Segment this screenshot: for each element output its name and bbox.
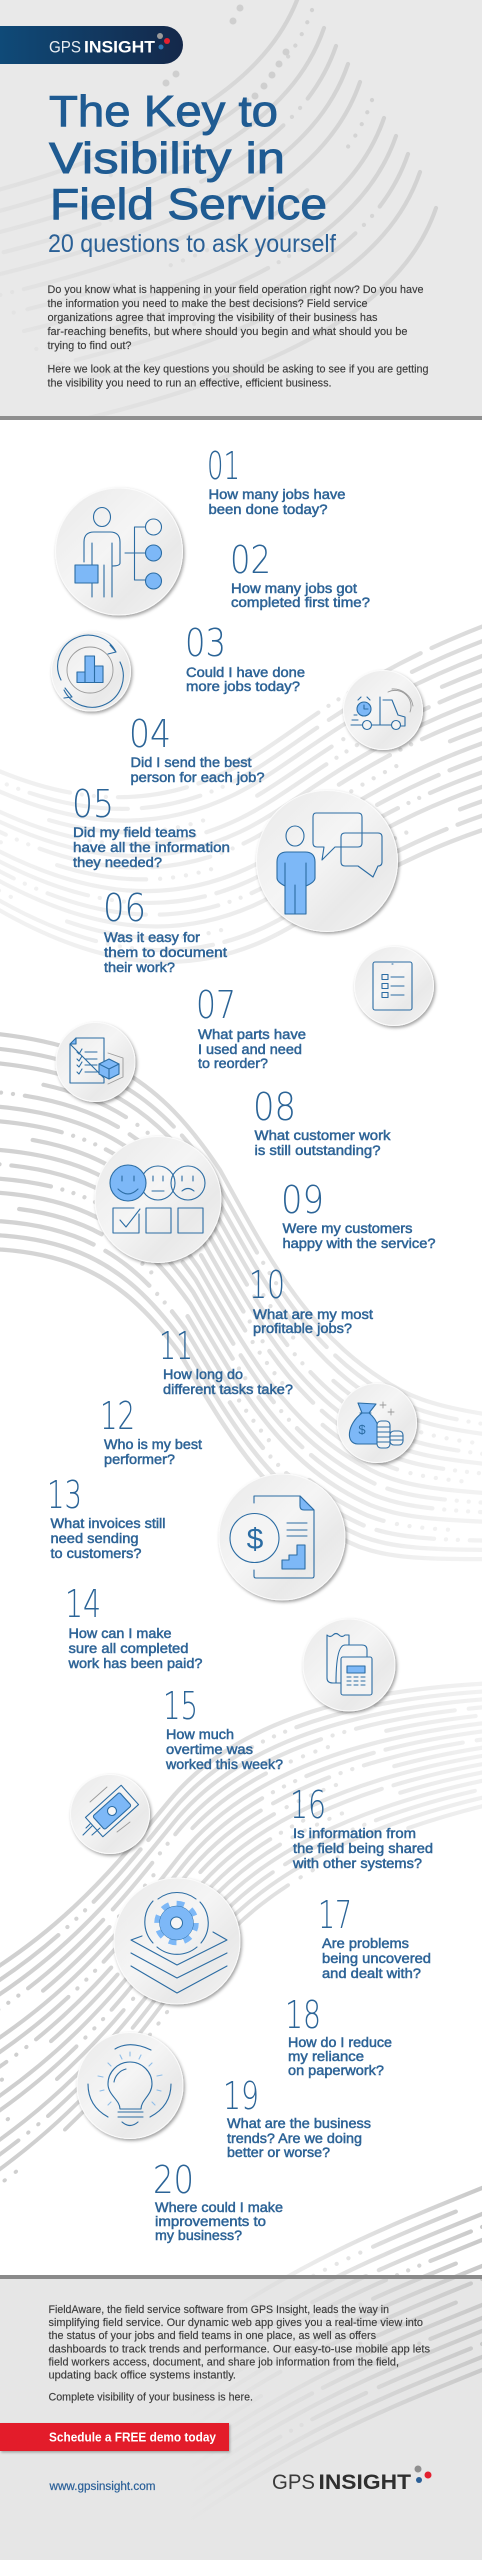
intro text: Do you know what is happening in your field operation right now? Do you have (48, 284, 424, 296)
number 09: 09 (281, 1178, 324, 1222)
question text 01: How many jobs have (208, 487, 346, 502)
question 06 (103, 886, 227, 975)
question text 06: Was it easy for (104, 930, 201, 945)
icon: invoice with dollar circle (219, 1474, 345, 1600)
question text 02: How many jobs got (231, 581, 357, 596)
icon: bar chart in cycle arrows (52, 632, 130, 711)
icon: flying banknote (70, 1774, 150, 1854)
question text 13: need sending (50, 1531, 138, 1546)
question 19 (223, 2074, 371, 2160)
number 01: 01 (207, 444, 240, 488)
question 17 (318, 1893, 431, 1981)
number 20: 20 (153, 2158, 194, 2202)
question text 12 (104, 1437, 202, 1467)
question text 20: Where could I make (155, 2200, 283, 2215)
question text 07 (198, 1027, 306, 1071)
question text 12: performer? (104, 1452, 175, 1467)
number 02: 02 (230, 538, 271, 582)
intro text: the visibility you need to run an effective, efficient business. (48, 378, 332, 390)
logo dots (414, 2466, 432, 2483)
number 19: 19 (223, 2074, 259, 2118)
question text 03: Could I have done (186, 665, 305, 680)
question text 14: sure all completed (68, 1641, 188, 1656)
question 15 (163, 1684, 283, 1772)
question text 14 (67, 1626, 203, 1671)
footer text: field workers access, document, and share job information from the field, (48, 2356, 399, 2368)
number 15: 15 (163, 1684, 198, 1728)
number 03: 03 (185, 621, 226, 665)
question text 19: better or worse? (227, 2145, 330, 2160)
header dots (162, 4, 290, 100)
question text 20: improvements to (155, 2214, 266, 2229)
question text 13 (50, 1516, 166, 1561)
wave band: footer arcs (180, 2156, 482, 2527)
number 14: 14 (65, 1582, 101, 1626)
question text 03 (186, 665, 305, 694)
title (49, 87, 327, 229)
question text 13: to customers? (50, 1546, 142, 1561)
question text 14: work has been paid? (67, 1656, 203, 1671)
question text 09: Were my customers (282, 1221, 413, 1236)
question 04 (129, 712, 264, 785)
question text 08: What customer work (254, 1128, 391, 1143)
number 06: 06 (103, 886, 146, 930)
question text 18: on paperwork? (288, 2063, 384, 2078)
question text 19: trends? Are we doing (227, 2131, 362, 2146)
call to action button (0, 2423, 229, 2451)
title: Field Service (50, 180, 327, 229)
footer text: simplifying field service. Our dynamic web app gives you a real-time view into (48, 2317, 423, 2329)
question text 05 (73, 825, 230, 870)
header panel background (0, 0, 482, 416)
number 13: 13 (47, 1473, 82, 1517)
footer logo (272, 2466, 432, 2494)
question text 06 (104, 930, 227, 975)
question text 15: How much (166, 1727, 234, 1742)
question 12 (100, 1394, 202, 1467)
number 16: 16 (290, 1783, 326, 1827)
intro text: organizations agree that improving the visibility of their business has (48, 312, 378, 324)
question text 15: overtime was (166, 1742, 253, 1757)
question text 18 (288, 2035, 392, 2078)
question text 11: How long do (163, 1367, 243, 1382)
wave band: right to lower left (0, 1682, 482, 2205)
number 17: 17 (318, 1893, 352, 1937)
wave band: header arcs (0, 0, 436, 421)
icon: card payment terminal (303, 1619, 395, 1711)
question text 20: my business? (155, 2228, 242, 2243)
footer text: updating back office systems instantly. (48, 2370, 236, 2382)
question 01 (207, 444, 346, 517)
question text 11: different tasks take? (163, 1382, 293, 1397)
question text 07: I used and need (198, 1042, 302, 1057)
intro text (48, 284, 428, 390)
question text 15: worked this week? (165, 1757, 283, 1772)
logo wordmark: GPS (49, 38, 81, 56)
icon: person with speech bubbles (256, 790, 398, 932)
number 07: 07 (196, 983, 236, 1027)
question text 17: Are problems (322, 1936, 409, 1951)
icon: tablet checklist (354, 946, 434, 1026)
icon: truck with clock (344, 670, 422, 750)
header divider (0, 416, 482, 420)
question text 06: them to document (104, 945, 227, 960)
question text 11 (163, 1367, 293, 1397)
question 02 (230, 538, 370, 610)
icon: parts list and cube (56, 1022, 135, 1102)
question 05 (72, 782, 230, 870)
question text 02 (231, 581, 370, 610)
number 05: 05 (72, 782, 114, 826)
question text 04: person for each job? (130, 770, 264, 785)
footer text (48, 2304, 431, 2404)
question text 15 (165, 1727, 283, 1772)
question text 19: What are the business (227, 2116, 371, 2131)
question 09 (281, 1178, 436, 1251)
question text 18: my reliance (288, 2049, 364, 2064)
footer text: the status of your jobs and field teams in one place, as well as offers (48, 2330, 377, 2342)
number 18: 18 (285, 1993, 321, 2037)
number 12: 12 (100, 1394, 135, 1438)
footer logo: INSIGHT (318, 2471, 411, 2494)
question text 08 (254, 1128, 391, 1158)
footer text: Complete visibility of your business is here. (48, 2392, 253, 2404)
question 11 (159, 1324, 293, 1397)
intro text: far-reaching benefits, but where should you begin and what should you be (48, 326, 408, 338)
subtitle: 20 questions to ask yourself (48, 230, 336, 258)
question text 09 (282, 1221, 436, 1251)
question 07 (196, 983, 306, 1071)
number 11: 11 (159, 1324, 193, 1368)
icon: light bulb (77, 2032, 183, 2138)
number 08: 08 (253, 1085, 296, 1129)
question text 07: to reorder? (198, 1056, 268, 1071)
footer divider (0, 2275, 482, 2279)
question text 07: What parts have (198, 1027, 306, 1042)
gear (158, 1904, 196, 1942)
number 04: 04 (129, 712, 171, 756)
question 18 (285, 1993, 392, 2078)
question text 19 (227, 2116, 371, 2160)
question text 18: How do I reduce (288, 2035, 392, 2050)
question text 17 (322, 1936, 431, 1981)
question 08 (253, 1085, 391, 1158)
question text 16: the field being shared (293, 1841, 433, 1856)
intro text: Here we look at the key questions you should be asking to see if you are getting (48, 364, 428, 376)
title: Visibility in (49, 134, 285, 183)
footer text: FieldAware, the field service software from GPS Insight, leads the way in (48, 2304, 389, 2316)
question text 05: have all the information (73, 840, 230, 855)
logo dots (157, 33, 170, 50)
question text 12: Who is my best (104, 1437, 202, 1452)
question 16 (290, 1783, 433, 1871)
question text 06: their work? (104, 960, 175, 975)
question text 10: profitable jobs? (253, 1321, 352, 1336)
dollar sign: $ (358, 1422, 366, 1437)
question text 04 (130, 755, 264, 785)
footer text: dashboards to track trends and performance. Our easy-to-use mobile app lets (48, 2344, 431, 2356)
icon: money bag and coins (338, 1384, 416, 1462)
dollar sign: $ (247, 1523, 264, 1556)
question text 03: more jobs today? (186, 679, 300, 694)
footer panel background (0, 2275, 482, 2560)
question 14 (65, 1582, 202, 1671)
question 20 (153, 2158, 283, 2243)
icon: satisfaction faces and checkboxes (95, 1136, 221, 1262)
question text 05: Did my field teams (73, 825, 196, 840)
question text 04: Did I send the best (130, 755, 252, 770)
question text 14: How can I make (68, 1626, 172, 1641)
intro text: trying to find out? (48, 340, 132, 352)
question text 01 (208, 487, 346, 517)
icon: manager with org tree (56, 488, 182, 615)
question text 13: What invoices still (50, 1516, 166, 1531)
logo pill: INSIGHT (84, 38, 156, 56)
question text 08: is still outstanding? (254, 1143, 380, 1158)
website url: www.gpsinsight.com (48, 2481, 156, 2493)
call to action button: Schedule a FREE demo today (49, 2430, 217, 2444)
question text 20 (155, 2200, 283, 2243)
wave band: left to lower right (0, 1030, 482, 1648)
question text 01: been done today? (208, 502, 328, 517)
number 10: 10 (249, 1263, 285, 1307)
question 03 (185, 621, 305, 694)
question 10 (249, 1263, 373, 1336)
question text 17: and dealt with? (322, 1966, 421, 1981)
question text 10 (253, 1307, 373, 1336)
question text 10: What are my most (253, 1307, 373, 1322)
question text 16: with other systems? (292, 1856, 422, 1871)
wave band: upper right to left (0, 600, 482, 998)
question text 05: they needed? (73, 855, 162, 870)
icon: gear on layers (114, 1878, 240, 2004)
intro text: the information you need to make the best decisions? Field service (48, 298, 368, 310)
question 13 (47, 1473, 166, 1561)
question text 09: happy with the service? (282, 1236, 436, 1251)
title: The Key to (49, 87, 278, 136)
question text 17: being uncovered (322, 1951, 431, 1966)
logo pill (0, 26, 183, 64)
footer logo: GPS (272, 2471, 315, 2494)
question text 02: completed first time? (231, 595, 370, 610)
question text 16: Is information from (293, 1826, 416, 1841)
question text 16 (292, 1826, 433, 1871)
